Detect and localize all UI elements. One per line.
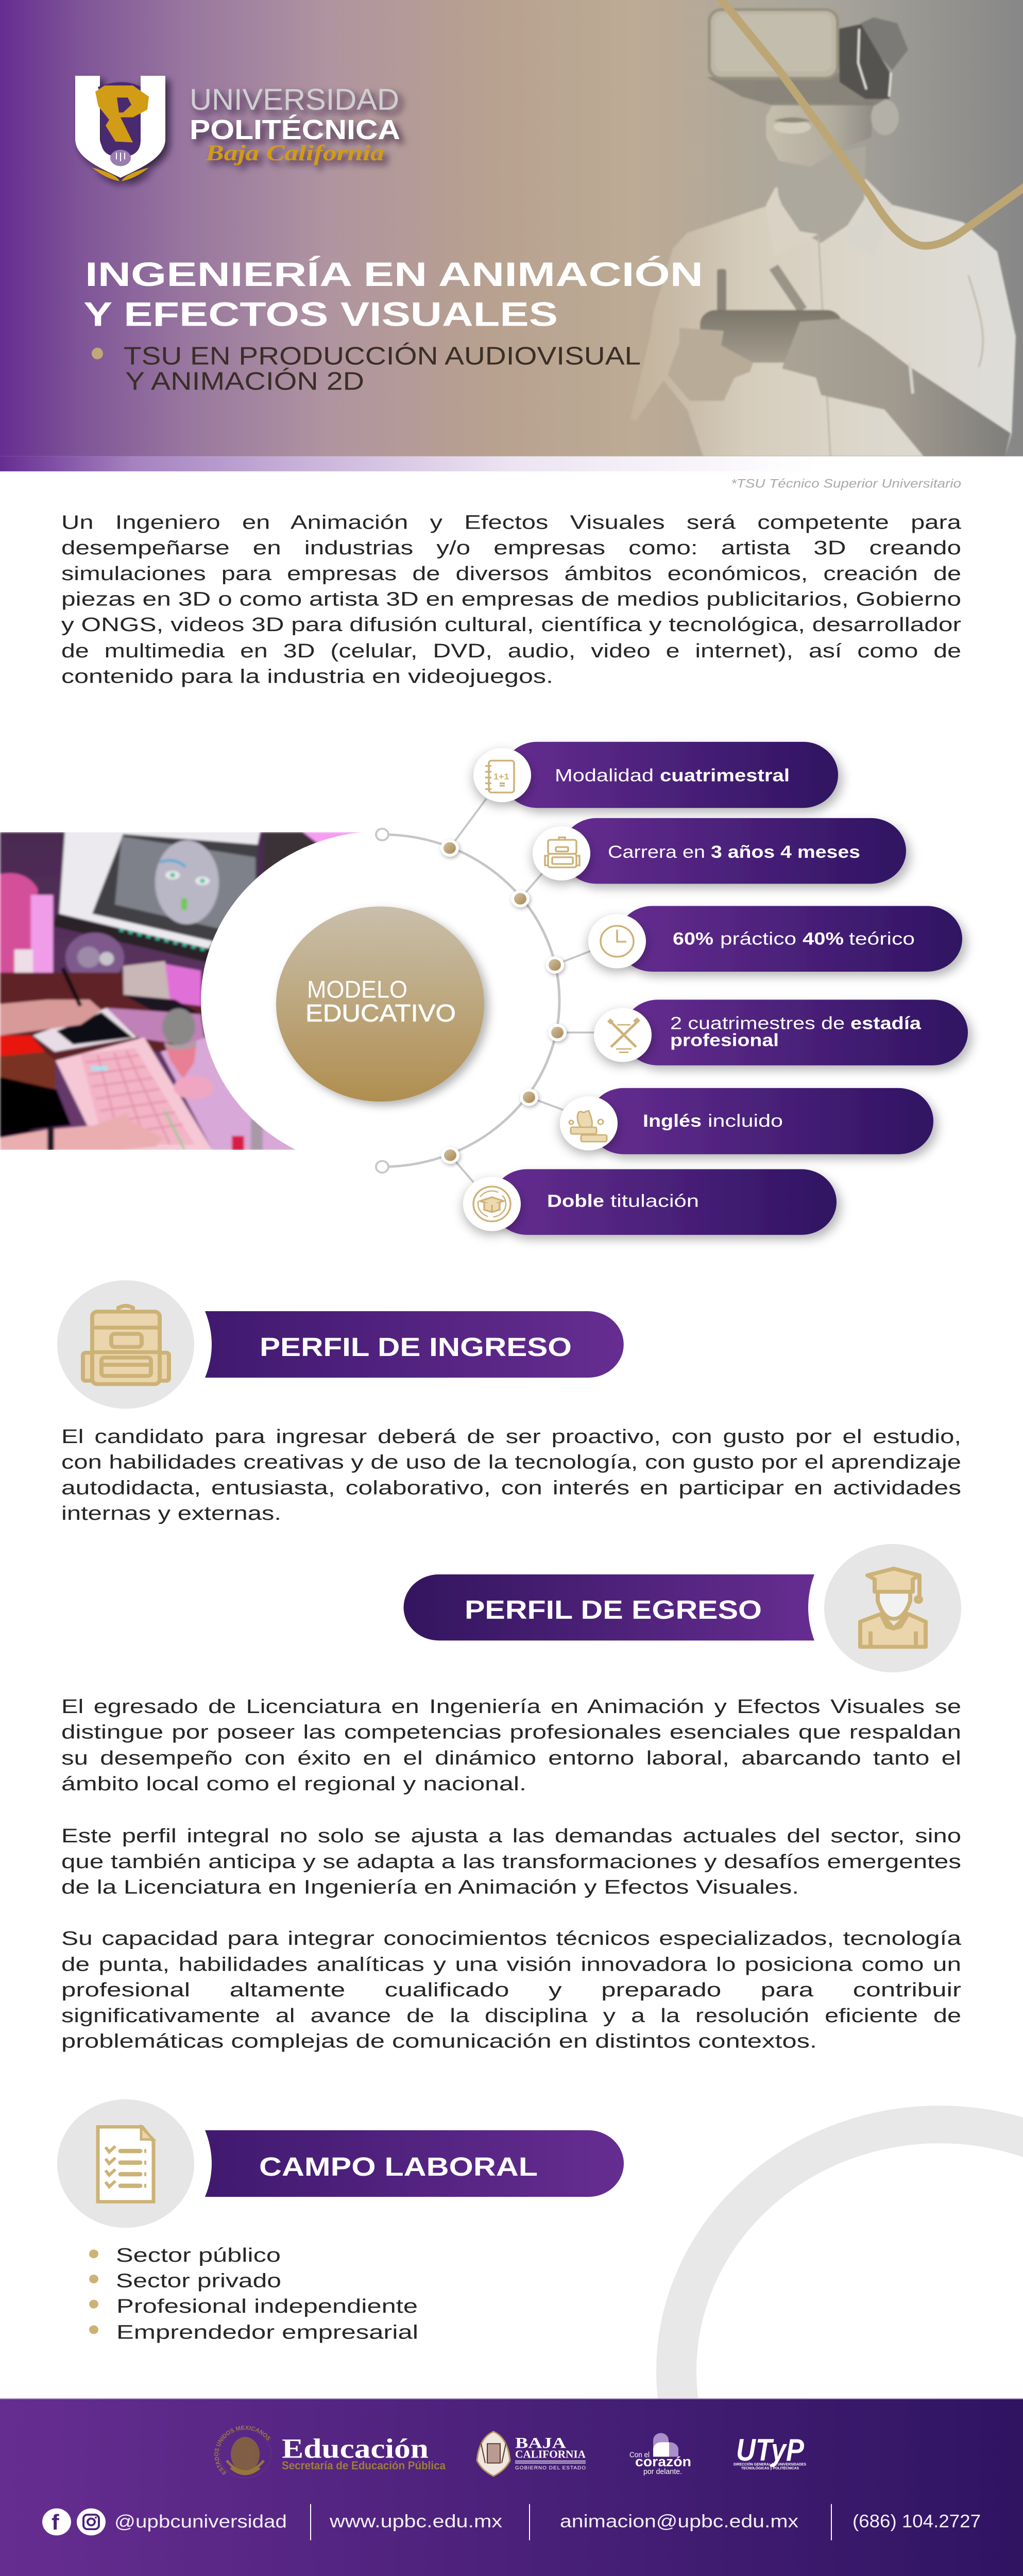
logo: Con el corazon por delante: por delante. — [643, 2468, 682, 2476]
central gold circle: modelo educativo: MODELO — [307, 976, 407, 1003]
logo: Con el corazon por delante — [629, 2433, 691, 2476]
text block: perfil de ingreso: autodidacta, entusiasta, colaborativo, con interés en participar en actividades — [61, 1477, 961, 1499]
banner: perfil de egreso: PERFIL DE EGRESO — [465, 1596, 762, 1625]
text block: intro: y ONGS, videos 3D para difusión cultural, científica y tecnológica, desarrollador — [61, 614, 961, 636]
item: modalidad cuatrimestral: cuatrimestral — [660, 766, 790, 785]
title: INGENIERÍA EN ANIMACIÓN — [85, 256, 703, 293]
text block: perfil de ingreso: internas y externas. — [61, 1502, 281, 1524]
logo: Baja California: GOBIERNO DEL ESTADO — [515, 2465, 586, 2471]
text block: perfil de egreso: ámbito local como el regional y nacional. — [61, 1773, 526, 1795]
text block: perfil de egreso: profesional altamente cualificado y preparado para contribuir — [61, 1979, 961, 2001]
item: 60% practico 40% teorico: 40% — [803, 929, 844, 948]
text block: perfil de egreso: El egresado de Licenciatura en Ingeniería en Animación y Efectos Visuales se — [61, 1696, 961, 1718]
text block: perfil de egreso: problemáticas complejas de comunicación en distintos contextos. — [61, 2030, 817, 2052]
icon: apple on books — [569, 1111, 607, 1142]
logo: Secretaria de Educacion Publica: Educación — [282, 2433, 429, 2464]
logo: UTyP: DIRECCIÓN GENERAL DE UNIVERSIDADES — [734, 2462, 806, 2466]
text block: perfil de egreso: de la Licenciatura en Ingeniería en Animación y Efectos Visuales. — [61, 1876, 799, 1898]
decorative gray arc — [656, 2106, 1023, 2398]
item: doble titulacion — [463, 1169, 837, 1235]
icon: notebook — [485, 760, 514, 792]
list: campo laboral: Sector privado — [116, 2270, 281, 2292]
banner: campo laboral: CAMPO LABORAL — [259, 2153, 538, 2182]
text block: perfil de egreso: Este perfil integral no solo se ajusta a las demandas actuales del sector, sino — [61, 1825, 961, 1847]
icon circle: graduate — [824, 1544, 961, 1672]
item: carrera en 3 años 4 meses: Carrera en — [608, 842, 705, 862]
title — [83, 256, 703, 333]
text block: intro: de multimedia en 3D (celular, DVD, audio, video e internet), así como de — [61, 640, 961, 662]
logo: Baja California: BAJA — [515, 2434, 567, 2451]
text block: perfil de egreso — [61, 1696, 962, 2052]
list: campo laboral — [89, 2244, 418, 2343]
item: modalidad cuatrimestral: Modalidad — [555, 766, 654, 785]
icon: backpack — [545, 837, 579, 868]
text block: perfil de egreso: distingue por poseer las competencias profesionales esenciales que respaldan — [61, 1721, 961, 1743]
logo wordmark — [190, 83, 400, 165]
item: 2 cuatrimestres de estadia profesional: 2 cuatrimestres de — [670, 1013, 845, 1033]
email: animacion@upbc.edu.mx — [560, 2511, 799, 2531]
text block: perfil de egreso: de punta, habilidades analíticas y una visión innovadora lo posiciona como un — [61, 1954, 961, 1975]
subtitle: TSU: TSU EN PRODUCCIÓN AUDIOVISUAL — [124, 342, 641, 370]
title: Y EFECTOS VISUALES — [83, 296, 558, 333]
text block: intro: contenido para la industria en videojuegos. — [61, 666, 553, 687]
text block: intro: simulaciones para empresas de diversos ámbitos económicos, creación de — [61, 563, 961, 585]
logo: UTyP: TECNOLÓGICAS y POLITÉCNICAS — [741, 2466, 799, 2470]
footer background — [0, 2399, 1023, 2576]
icon: facebook: f — [52, 2511, 59, 2535]
text block: perfil de ingreso: El candidato para ingresar deberá de ser proactivo, con gusto por el estudio, — [61, 1426, 961, 1448]
icon: facebook — [42, 2509, 71, 2535]
logo wordmark: POLITÉCNICA — [190, 114, 400, 145]
text block: perfil de egreso: su desempeño con éxito en el dinámico entorno laboral, abarcando tanto el — [61, 1747, 961, 1769]
subtitle: TSU — [92, 342, 641, 395]
text block: perfil de ingreso — [61, 1426, 961, 1524]
panel: hero header — [0, 0, 1023, 456]
panel: modelo educativo diagram — [0, 742, 968, 1235]
logo shield — [75, 76, 165, 181]
icon: graduation cap in circle — [473, 1187, 510, 1222]
item: ingles incluido: incluido — [708, 1111, 783, 1131]
text block: perfil de ingreso: con habilidades creativas y de uso de la tecnología, con gusto por el aprendizaje — [61, 1451, 961, 1473]
text block: intro — [61, 512, 962, 687]
gray ring — [382, 835, 559, 1167]
item: ingles incluido — [560, 1088, 933, 1154]
hero gradient background — [0, 0, 1023, 456]
list: campo laboral: Profesional independiente — [116, 2295, 418, 2317]
text block: perfil de egreso: significativamente al avance de la disciplina y a la resolución eficiente de — [61, 2005, 961, 2027]
icon: crossed pencils — [609, 1019, 639, 1053]
logo: Secretaria de Educacion Publica: Secretaría de Educación Pública — [282, 2459, 446, 2472]
white central disk — [201, 831, 562, 1170]
phone: (686) 104.2727 — [852, 2511, 981, 2531]
item: 2 cuatrimestres de estadia profesional: estadía — [850, 1013, 922, 1033]
item: 60% practico 40% teorico: 60% — [673, 929, 713, 948]
dividers — [311, 2504, 831, 2540]
subtitle: TSU: Y ANIMACIÓN 2D — [125, 367, 364, 395]
item: 2 cuatrimestres de estadia profesional — [594, 999, 968, 1065]
logo: Secretaria de Educacion Publica — [214, 2425, 446, 2478]
social icons and handle — [42, 2509, 287, 2535]
item: 60% practico 40% teorico: práctico — [720, 929, 796, 948]
icon circle: checklist document — [57, 2099, 194, 2228]
banner: campo laboral — [205, 2130, 624, 2197]
section: perfil de ingreso — [57, 1280, 624, 1409]
ring end caps — [376, 829, 388, 1173]
footer — [0, 2398, 1023, 2576]
section: perfil de egreso — [404, 1544, 961, 1672]
list: campo laboral: Sector público — [116, 2244, 281, 2266]
text block: intro: piezas en 3D o como artista 3D en empresas de medios publicitarios, Gobierno — [61, 588, 961, 610]
text block: perfil de egreso: Su capacidad para integrar conocimientos técnicos especializados, tecnología — [61, 1927, 962, 1950]
item: 60% practico 40% teorico: teórico — [849, 929, 915, 948]
logo: Baja California — [477, 2432, 586, 2476]
central gold circle: modelo educativo: EDUCATIVO — [305, 1000, 456, 1027]
icon: instagram — [77, 2509, 106, 2535]
item: ingles incluido: Inglés — [643, 1111, 702, 1131]
central gold circle: modelo educativo — [276, 906, 484, 1101]
logo: Baja California: CALIFORNIA — [515, 2448, 586, 2460]
icon: notebook: 1+1 — [493, 771, 509, 782]
website: www.upbc.edu.mx — [329, 2511, 503, 2531]
gradient strip under hero — [0, 456, 1023, 471]
footnote: *TSU Técnico Superior Universitario — [731, 477, 961, 491]
section: campo laboral — [57, 2099, 624, 2228]
icon circle: backpack — [57, 1280, 194, 1409]
banner: perfil de egreso — [404, 1574, 814, 1640]
logo: UTyP: UTyP — [736, 2433, 805, 2468]
logo wordmark: Baja California — [205, 141, 384, 165]
banner: perfil de ingreso — [205, 1311, 624, 1378]
seal: ESTADOS UNIDOS MEXICANOS — [214, 2426, 270, 2475]
logo: Con el corazon por delante: Con el — [629, 2451, 650, 2459]
logo: Universidad Politécnica Baja California — [75, 76, 400, 181]
item: modalidad cuatrimestral — [473, 742, 838, 808]
item: 60% practico 40% teorico — [588, 906, 962, 972]
photo: man with VR headset and controller — [630, 10, 1016, 456]
item: 2 cuatrimestres de estadia profesional: profesional — [670, 1030, 779, 1050]
social icons and handle: @upbcuniversidad — [114, 2511, 287, 2532]
text block: intro: Un Ingeniero en Animación y Efectos Visuales será competente para — [61, 512, 962, 533]
item: doble titulacion: Doble — [547, 1191, 604, 1211]
item: carrera en 3 años 4 meses — [533, 818, 906, 884]
logo: Con el corazon por delante: corazón — [635, 2454, 691, 2469]
connectors — [450, 799, 594, 1182]
list: campo laboral: Emprendedor empresarial — [116, 2321, 418, 2343]
banner: perfil de ingreso: PERFIL DE INGRESO — [260, 1333, 572, 1362]
photo: animation workstation — [0, 832, 362, 1150]
item: carrera en 3 años 4 meses: 3 años 4 meses — [711, 842, 860, 862]
text block: perfil de egreso: que también anticipa y se adapta a las transformaciones y desafíos emergentes — [61, 1851, 961, 1873]
item: doble titulacion: titulación — [610, 1191, 699, 1211]
ring nodes — [440, 839, 567, 1164]
icon: clock — [601, 926, 634, 957]
logo wordmark: UNIVERSIDAD — [190, 83, 399, 116]
gold accent line — [720, 0, 1023, 246]
text block: intro: desempeñarse en industrias y/o empresas como: artista 3D creando — [61, 537, 961, 559]
